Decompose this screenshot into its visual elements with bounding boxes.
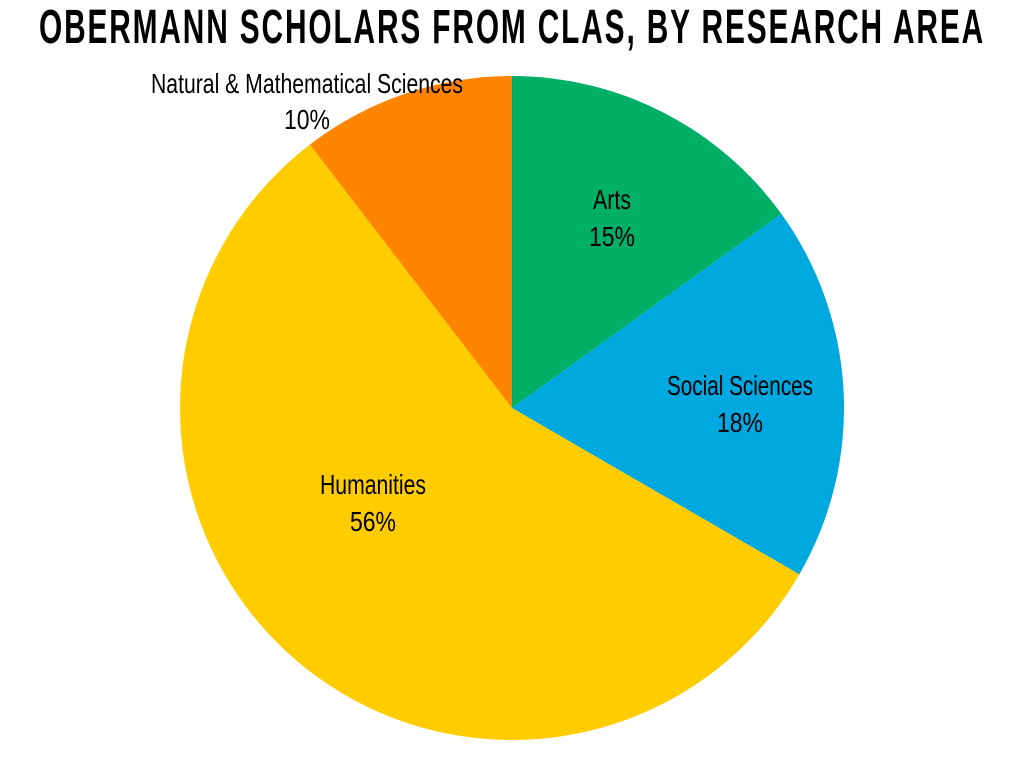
label: humanities: 56% xyxy=(350,506,396,537)
slice: humanities xyxy=(180,145,799,740)
label: arts xyxy=(589,184,635,252)
label: natural & mathematical sciences xyxy=(151,68,463,135)
label: social sciences xyxy=(667,370,813,438)
label: social sciences: Social Sciences xyxy=(667,370,813,401)
label: natural & mathematical sciences: 10% xyxy=(284,104,330,135)
label: arts: 15% xyxy=(589,221,635,252)
slice: social sciences xyxy=(512,214,844,574)
label: arts: Arts xyxy=(593,184,631,215)
label: social sciences: 18% xyxy=(717,407,763,438)
slice: arts xyxy=(512,76,781,408)
label: humanities: Humanities xyxy=(320,469,426,500)
pie chart xyxy=(180,76,844,740)
label: natural & mathematical sciences: Natural & Mathematical Sciences xyxy=(151,68,463,99)
label: humanities xyxy=(320,469,426,537)
slice: natural & mathematical sciences xyxy=(310,76,512,408)
